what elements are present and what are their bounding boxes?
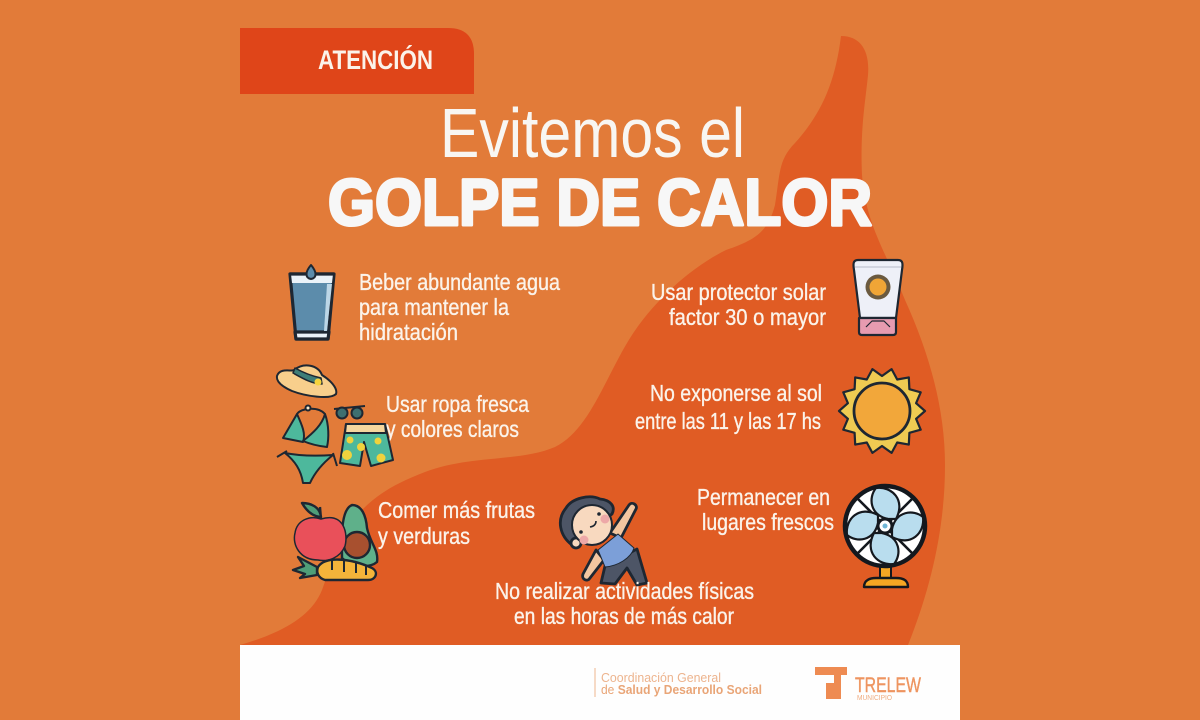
banner: atención bbox=[240, 28, 474, 94]
bikini top bbox=[283, 406, 328, 447]
icon: fruit and vegetables bbox=[293, 503, 377, 580]
title: GOLPE DE CALOR bbox=[328, 165, 872, 239]
tip: protector solar: Usar protector solar bbox=[651, 279, 826, 305]
tip: beber agua: para mantener la bbox=[359, 294, 509, 320]
tip: ropa fresca: Usar ropa fresca bbox=[386, 391, 529, 417]
icon: sunscreen bbox=[853, 260, 903, 335]
tip: beber agua: hidratación bbox=[359, 319, 458, 345]
tip: no exponerse al sol: No exponerse al sol bbox=[650, 380, 822, 406]
shorts bbox=[340, 424, 393, 466]
tip: lugares frescos bbox=[697, 484, 834, 535]
icon: summer clothes bbox=[277, 365, 393, 483]
footer: trelew logo bbox=[815, 667, 921, 702]
footer: coordinación general: Coordinación General bbox=[601, 670, 721, 685]
footer: trelew logo: MUNICIPIO bbox=[857, 695, 893, 702]
tip: actividades físicas: No realizar actividades físicas bbox=[495, 578, 754, 604]
tip: lugares frescos: Permanecer en bbox=[697, 484, 830, 510]
hat bbox=[277, 365, 336, 397]
tip: protector solar: factor 30 o mayor bbox=[669, 304, 826, 330]
tip: ropa fresca bbox=[386, 391, 529, 442]
sunglasses bbox=[334, 406, 365, 418]
tip: no exponerse al sol: entre las 11 y las 17 hs bbox=[635, 408, 821, 434]
icon: sun bbox=[839, 369, 925, 453]
footer: trelew logo: TRELEW bbox=[855, 674, 921, 697]
title: Evitemos el bbox=[440, 94, 745, 172]
footer: coordinación general bbox=[595, 668, 762, 697]
tip: beber agua bbox=[359, 269, 560, 345]
icon: water glass bbox=[290, 265, 334, 339]
icon: stretching person bbox=[560, 497, 647, 585]
icon: fan bbox=[845, 486, 925, 587]
bikini bottom bbox=[277, 451, 337, 483]
tip: protector solar bbox=[651, 279, 826, 330]
tip: frutas y verduras: Comer más frutas bbox=[378, 497, 535, 523]
tip: actividades físicas bbox=[495, 578, 754, 629]
tip: lugares frescos: lugares frescos bbox=[702, 509, 834, 535]
tip: frutas y verduras bbox=[378, 497, 535, 549]
tip: beber agua: Beber abundante agua bbox=[359, 269, 560, 295]
footer panel bbox=[240, 645, 960, 720]
tip: ropa fresca: y colores claros bbox=[386, 416, 519, 442]
background blob bbox=[240, 36, 945, 645]
tip: no exponerse al sol bbox=[635, 380, 822, 434]
tip: actividades físicas: en las horas de más calor bbox=[514, 603, 734, 629]
tip: frutas y verduras: y verduras bbox=[378, 523, 470, 549]
banner: atención: ATENCIÓN bbox=[318, 44, 433, 75]
title bbox=[328, 94, 872, 239]
footer: coordinación general: de Salud y Desarrollo Social bbox=[601, 682, 762, 697]
